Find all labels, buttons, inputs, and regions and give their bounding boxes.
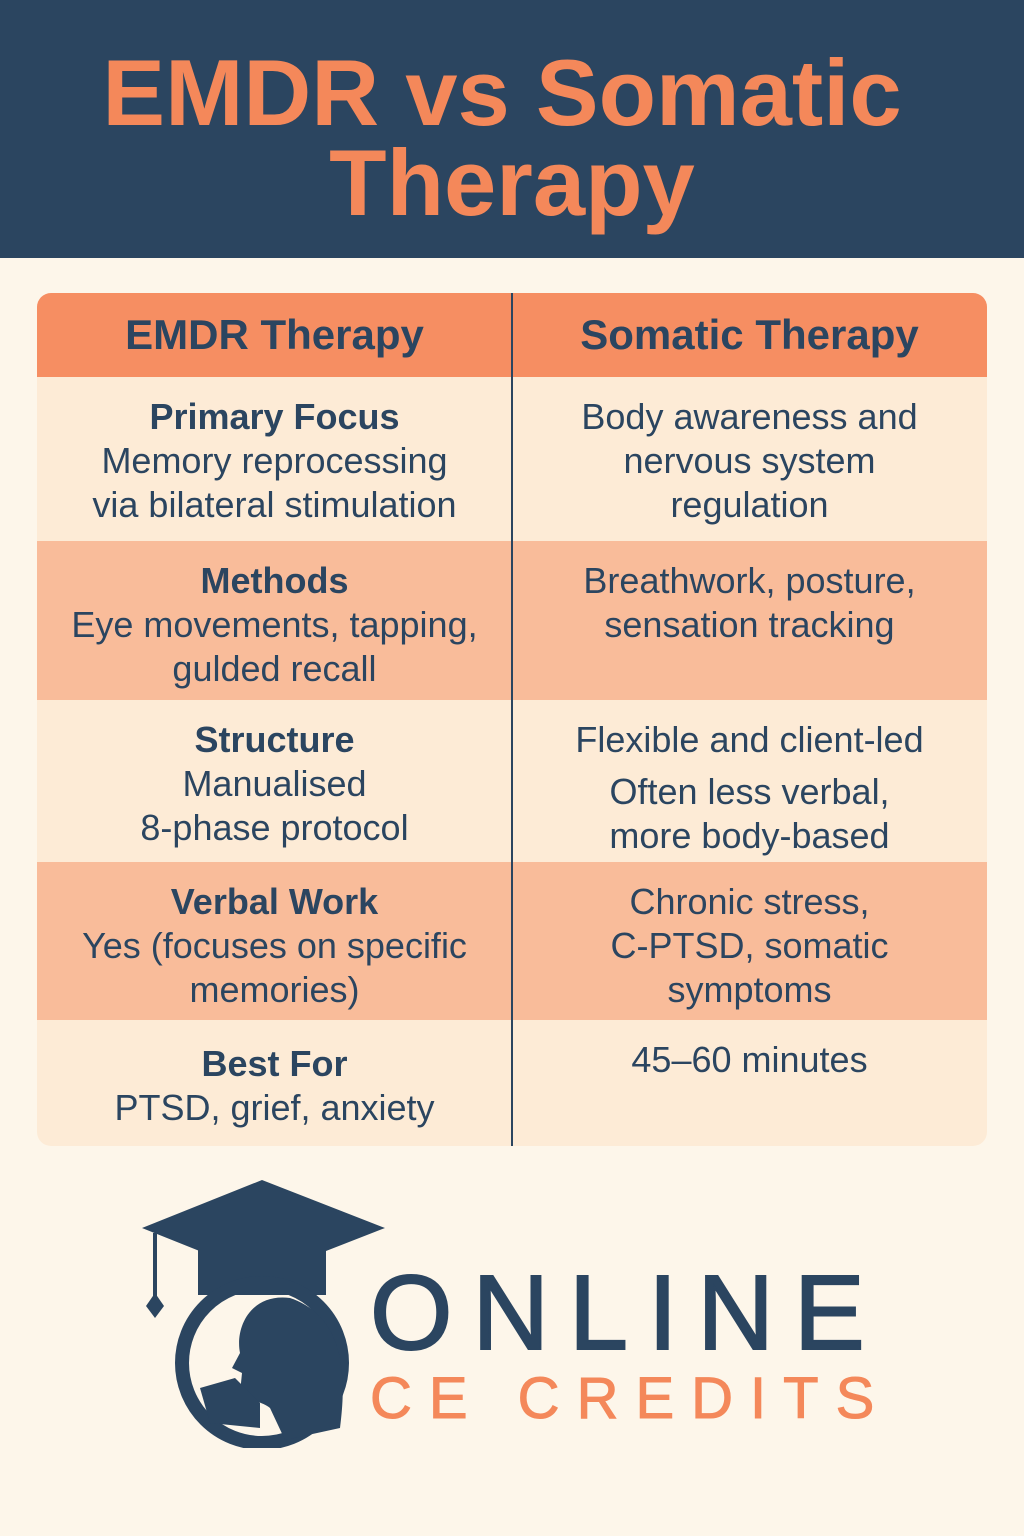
text: CE CREDITS: CE CREDITS [370,1366,891,1431]
row: structure: 8-phase protocol [140,807,409,848]
row: best for [37,1020,987,1146]
table header row: Somatic Therapy [580,311,919,358]
row: primary focus [37,377,987,541]
row: structure: Flexible and client-led [575,719,924,760]
row: methods: Eye movements, tapping, [71,604,478,645]
row: primary focus: regulation [670,484,829,525]
row: structure: Manualised [182,763,367,804]
row: verbal work: Chronic stress, [629,881,870,922]
row: primary focus: Body awareness and [581,396,918,437]
logo [142,1180,891,1448]
row: best for: PTSD, grief, anxiety [114,1087,435,1128]
row: verbal work: memories) [189,969,360,1010]
header band [0,0,1024,258]
row: primary focus: Memory reprocessing [101,440,448,481]
title line 1: EMDR vs Somatic [102,40,902,145]
icon: graduate head [142,1180,385,1448]
row: methods: sensation tracking [604,604,895,645]
comparison table [37,293,987,1146]
row: best for: 45–60 minutes [631,1039,868,1080]
row: primary focus: nervous system [623,440,876,481]
table header row: EMDR Therapy [125,311,424,358]
row: methods: Breathwork, posture, [583,560,916,601]
table header row [37,293,987,377]
row: structure: Structure [194,719,355,760]
row: primary focus: via bilateral stimulation [92,484,457,525]
row: verbal work: Yes (focuses on specific [82,925,467,966]
row: primary focus: Primary Focus [149,396,400,437]
text: ONLINE: ONLINE [370,1254,885,1372]
row: verbal work: symptoms [667,969,832,1010]
row: methods [37,541,987,700]
row: structure [37,700,987,862]
row: structure: Often less verbal, [609,771,890,812]
row: methods: gulded recall [172,648,377,689]
title line 2: Therapy [329,130,695,235]
row: methods: Methods [200,560,348,601]
row: verbal work [37,862,987,1020]
row: structure: more body-based [609,815,890,856]
row: best for: Best For [201,1043,348,1084]
row: verbal work: C-PTSD, somatic [610,925,889,966]
row: verbal work: Verbal Work [171,881,378,922]
